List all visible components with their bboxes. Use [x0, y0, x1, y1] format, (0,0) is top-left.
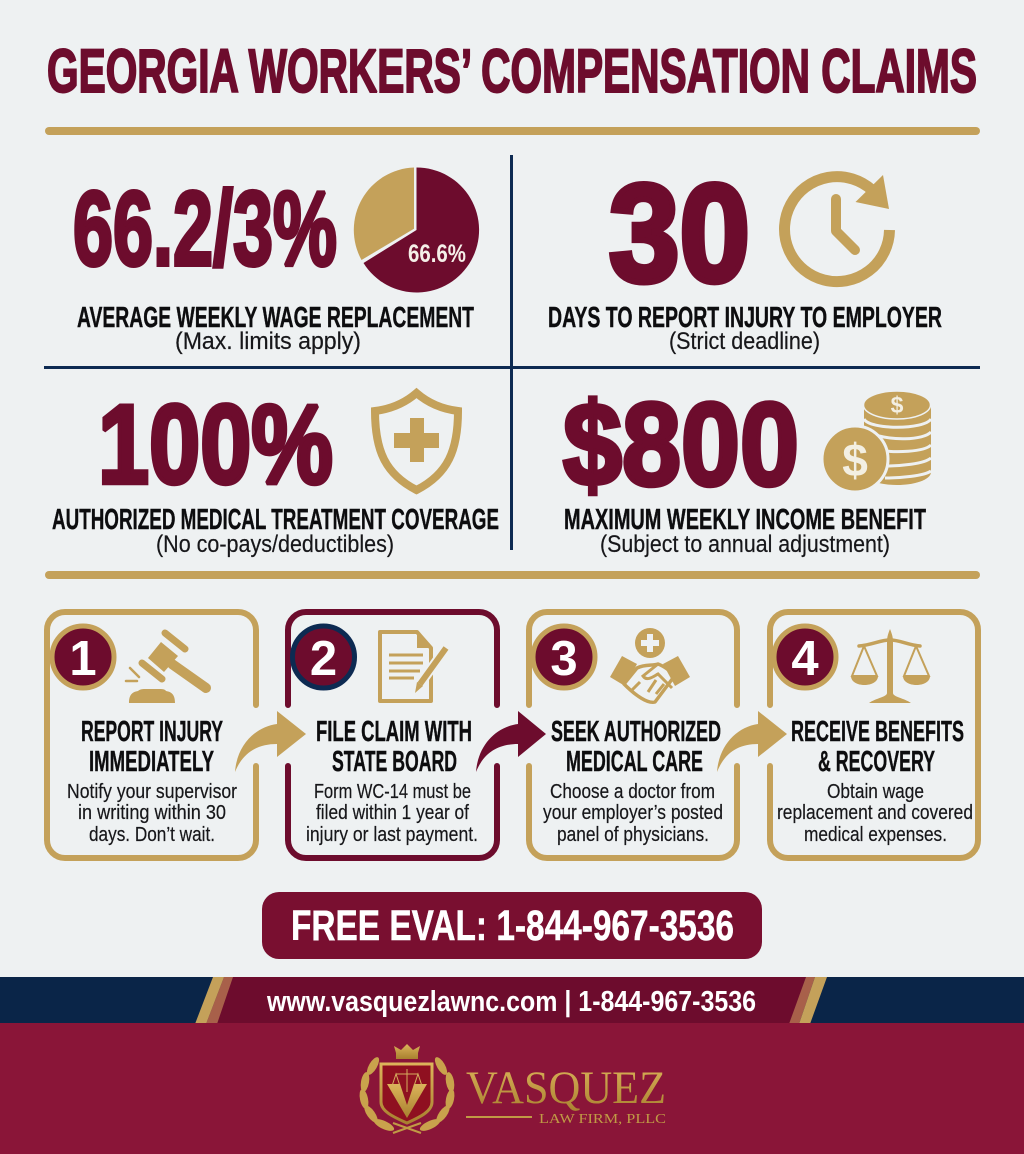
step description	[306, 780, 478, 846]
contact band	[0, 977, 1024, 1024]
logo: firm name: VASQUEZ	[466, 1062, 666, 1114]
stat note: (Strict deadline)	[669, 328, 820, 355]
step heading: & RECOVERY	[818, 746, 935, 778]
stat panel: medical coverage	[52, 382, 499, 558]
icon: coin stack: $	[891, 392, 904, 418]
step description: Form WC-14 must be	[314, 780, 471, 803]
step description: days. Don’t wait.	[89, 823, 215, 846]
icon: coin stack: $	[842, 434, 868, 486]
stat note: (Subject to annual adjustment)	[600, 531, 890, 558]
icon: pie chart	[354, 167, 479, 292]
stat note: (No co-pays/deductibles)	[156, 531, 394, 558]
stat label: AVERAGE WEEKLY WAGE REPLACEMENT	[77, 302, 474, 334]
stat panel: reporting deadline	[548, 156, 942, 355]
step number	[774, 626, 836, 688]
contact band: www.vasquezlawnc.com | 1-844-967-3536	[266, 986, 756, 1018]
step 3 card	[529, 612, 737, 858]
step 2 card	[288, 612, 497, 858]
icon: clock with arrow	[785, 175, 890, 282]
icon: shield with cross	[375, 393, 458, 490]
icon: scales of justice	[851, 629, 930, 703]
step number	[52, 626, 114, 688]
step description	[67, 780, 237, 846]
icon: coin stack	[822, 391, 931, 492]
stat label: AUTHORIZED MEDICAL TREATMENT COVERAGE	[52, 504, 499, 536]
step description	[777, 780, 973, 846]
step description: panel of physicians.	[557, 823, 709, 846]
logo: crest	[358, 1044, 456, 1133]
step heading	[791, 716, 964, 778]
step description	[543, 780, 723, 846]
call to action button: FREE EVAL: 1-844-967-3536	[291, 902, 734, 950]
step heading: REPORT INJURY	[81, 716, 223, 748]
step heading: SEEK AUTHORIZED	[551, 716, 721, 748]
stat panel: maximum benefit	[563, 379, 931, 558]
step description: Notify your supervisor	[67, 780, 237, 803]
step heading: FILE CLAIM WITH	[316, 716, 472, 748]
step heading	[316, 716, 472, 778]
stat number: $800	[563, 379, 799, 511]
stat panel: wage replacement	[73, 167, 479, 355]
call to action button	[262, 892, 762, 959]
step heading: IMMEDIATELY	[89, 746, 214, 778]
stat note: (Max. limits apply)	[175, 328, 361, 355]
step 1 card	[47, 612, 256, 858]
logo: firm name: LAW FIRM, PLLC	[539, 1112, 666, 1127]
icon: handshake with medical cross	[610, 628, 690, 702]
arrow: step 1 to 2	[235, 711, 306, 772]
step heading	[551, 716, 721, 778]
step number: 2	[310, 632, 337, 686]
step description: Choose a doctor from	[550, 780, 715, 803]
step description: your employer’s posted	[543, 801, 723, 824]
step description: in writing within 30	[78, 801, 226, 824]
step number	[533, 626, 595, 688]
step description: medical expenses.	[804, 823, 947, 846]
step description: Obtain wage	[827, 780, 924, 803]
stat number: 100%	[98, 382, 333, 507]
step description: filed within 1 year of	[316, 801, 469, 824]
footer band	[0, 1023, 1024, 1154]
step number: 3	[550, 632, 578, 686]
step heading: STATE BOARD	[332, 746, 457, 778]
arrow: step 3 to 4	[717, 711, 787, 772]
stat number: 66.2/3%	[73, 170, 337, 288]
step description: replacement and covered	[777, 801, 973, 824]
step number	[292, 626, 354, 688]
step number: 4	[791, 632, 819, 686]
step heading: MEDICAL CARE	[566, 746, 703, 778]
step heading	[81, 716, 223, 778]
icon: gavel	[126, 633, 206, 703]
step 4 card	[770, 612, 978, 858]
step description: injury or last payment.	[306, 823, 478, 846]
icon: pie chart: 66.6%	[408, 240, 466, 268]
step number: 1	[69, 632, 97, 686]
stat number: 30	[609, 156, 750, 311]
icon: document and pen	[380, 632, 446, 701]
arrow: step 2 to 3	[476, 711, 546, 772]
